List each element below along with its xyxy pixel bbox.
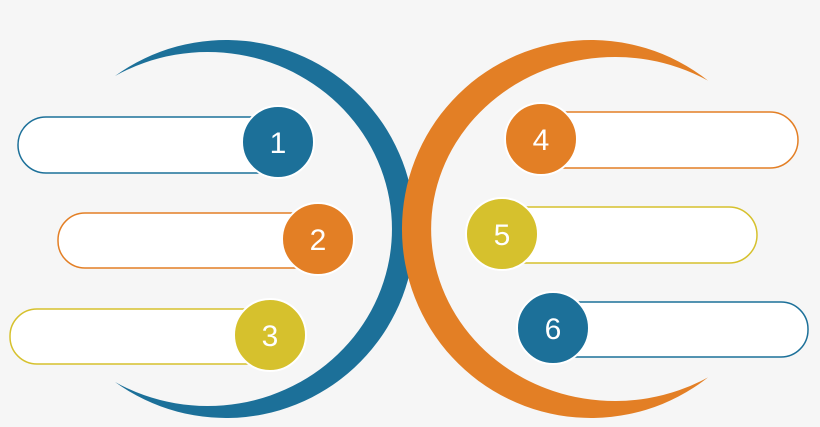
item 6: 6 [545, 313, 561, 346]
item 2: 2 [310, 224, 326, 257]
item 3: 3 [262, 320, 278, 353]
item 4: 4 [533, 124, 549, 157]
blue crescent [115, 40, 415, 418]
item 2 [58, 203, 354, 275]
item 5: 5 [494, 219, 510, 252]
item 4 [505, 103, 798, 175]
item 6 [517, 292, 808, 364]
item 5 [466, 198, 757, 270]
item 1 [18, 106, 314, 178]
orange crescent [402, 40, 708, 418]
item 3 [10, 299, 306, 371]
item 1: 1 [270, 127, 286, 160]
